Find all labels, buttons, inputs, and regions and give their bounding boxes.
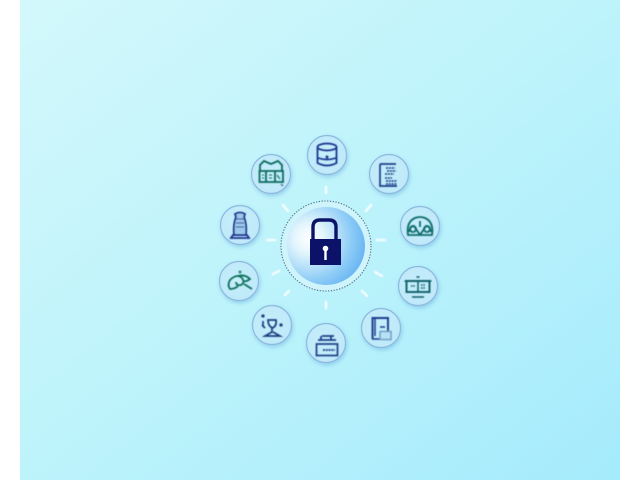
icon: cylinder [318,144,336,166]
node: swirl [220,262,258,300]
node: trophy [252,306,292,344]
connector arrows [267,187,385,308]
central hub [281,201,371,291]
node: bag [220,206,260,244]
node: database [308,136,346,174]
icon: twin dials [408,217,432,235]
icon: door and box [372,318,391,340]
icon: document [380,164,397,186]
node: door and box [362,308,400,348]
icon: house [260,161,283,186]
icon: swirl [228,272,252,289]
icon: drawer [316,336,338,356]
icon: monitor [404,277,432,297]
icon: trophy [262,315,282,336]
icon: padlock [310,220,341,265]
node: house [252,154,290,194]
node: document [370,154,408,194]
icon: bag [231,212,249,238]
node: monitor [398,266,438,306]
node: gauges [400,206,440,246]
node: drawer [306,324,346,362]
